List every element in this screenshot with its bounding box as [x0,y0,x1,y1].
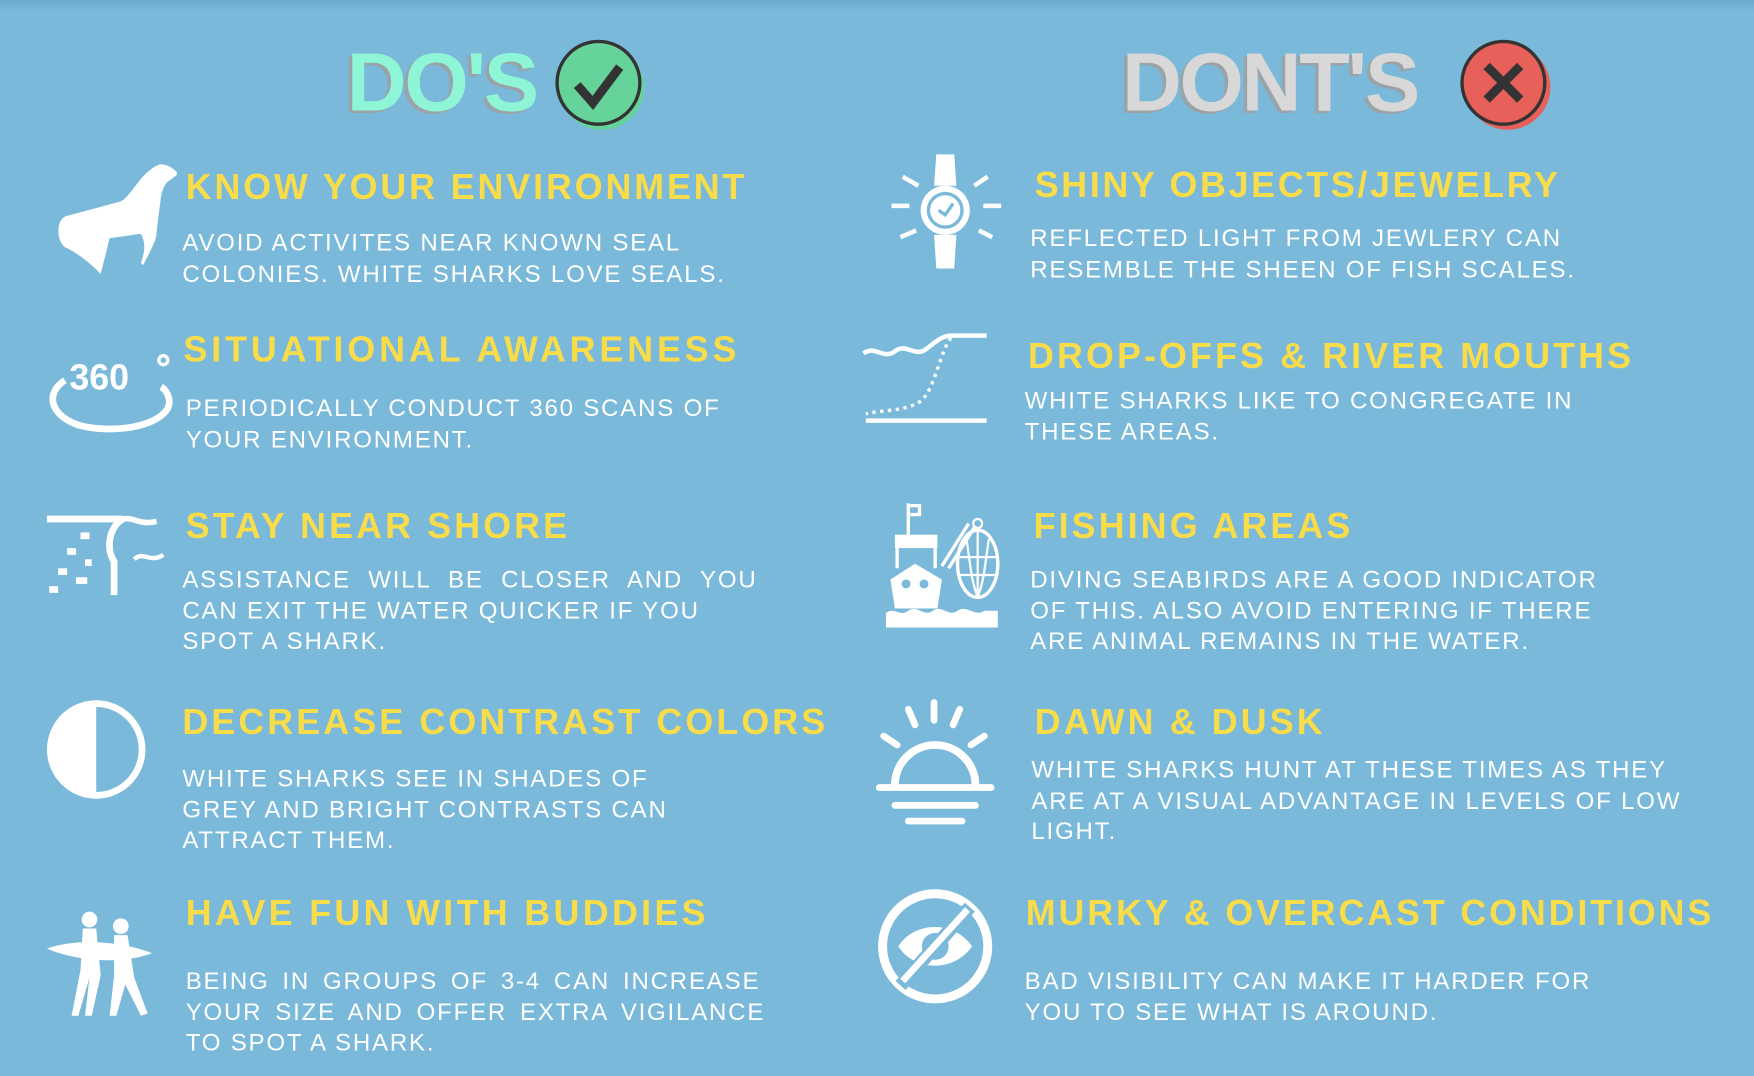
icon: surfers [47,912,152,1016]
heading: fishing areas: FISHING AREAS [1034,506,1353,546]
icon: x circle [1460,40,1550,130]
text: SPOT A SHARK. [182,628,387,654]
title: DONT'S: DONT'S [1122,36,1418,129]
icon: no visibility [878,889,992,1004]
text: ARE ANIMAL REMAINS IN THE WATER. [1030,628,1530,654]
text: TO SPOT A SHARK. [186,1029,435,1056]
text: THESE AREAS. [1025,418,1220,445]
icon: 360: 360 [69,357,129,397]
text: OF THIS. ALSO AVOID ENTERING IF THERE [1030,597,1592,624]
heading: know your environment: KNOW YOUR ENVIRONMENT [186,167,747,207]
text [186,968,765,1056]
text [1030,225,1576,282]
icon: half circle [47,700,146,799]
text [1024,387,1573,445]
text [182,229,726,287]
text [182,566,757,654]
heading: stay near shore: STAY NEAR SHORE [186,506,570,546]
text: WHITE SHARKS LIKE TO CONGREGATE IN [1025,387,1573,414]
icon: fishing boat [886,503,1000,628]
text: ASSISTANCE WILL BE CLOSER AND YOU [182,566,757,593]
heading: dawn & dusk: DAWN & DUSK [1035,701,1326,742]
icon: seal [58,164,177,274]
heading: decrease contrast colors: DECREASE CONTRAST COLORS [182,701,828,742]
heading: murky & overcast conditions: MURKY & OVERCAST CONDITIONS [1026,893,1714,933]
text [182,765,668,854]
text: YOUR ENVIRONMENT. [186,426,474,452]
panel: don'ts [862,154,1714,1025]
text: PERIODICALLY CONDUCT 360 SCANS OF [186,395,721,422]
icon: shore [47,516,164,596]
text: GREY AND BRIGHT CONTRASTS CAN [182,796,668,823]
heading: situational awareness: SITUATIONAL AWARENESS [183,329,740,369]
panel: do's [47,164,828,1056]
text: ATTRACT THEM. [182,827,395,854]
heading: shiny objects/jewelry: SHINY OBJECTS/JEWELRY [1035,164,1561,205]
text: YOUR SIZE AND OFFER EXTRA VIGILANCE [186,998,765,1025]
text: AVOID ACTIVITES NEAR KNOWN SEAL [182,229,681,256]
text: YOU TO SEE WHAT IS AROUND. [1025,998,1438,1025]
icon: drop-off [862,333,987,423]
text [1025,968,1591,1025]
title: DO'S: DO'S [347,36,537,129]
icon: 360 [49,354,173,432]
text: WHITE SHARKS HUNT AT THESE TIMES AS THEY [1031,756,1667,783]
text: COLONIES. WHITE SHARKS LOVE SEALS. [182,260,726,287]
text [186,395,721,452]
text: REFLECTED LIGHT FROM JEWLERY CAN [1030,225,1562,252]
text [1030,566,1598,654]
heading: have fun with buddies: HAVE FUN WITH BUDDIES [186,893,709,933]
text: ARE AT A VISUAL ADVANTAGE IN LEVELS OF LOW [1031,787,1681,814]
text: WHITE SHARKS SEE IN SHADES OF [182,765,649,792]
text: BEING IN GROUPS OF 3-4 CAN INCREASE [186,968,760,994]
text: DIVING SEABIRDS ARE A GOOD INDICATOR [1030,566,1598,593]
text [1031,756,1681,845]
heading: drop-offs & river mouths: DROP-OFFS & RIVER MOUTHS [1028,336,1634,376]
text: RESEMBLE THE SHEEN OF FISH SCALES. [1030,256,1576,282]
icon: check circle [555,40,644,130]
text: CAN EXIT THE WATER QUICKER IF YOU [182,597,700,624]
text: LIGHT. [1031,818,1117,845]
icon: watch [892,154,1002,268]
text: BAD VISIBILITY CAN MAKE IT HARDER FOR [1025,968,1591,994]
icon: sunrise [876,699,994,824]
